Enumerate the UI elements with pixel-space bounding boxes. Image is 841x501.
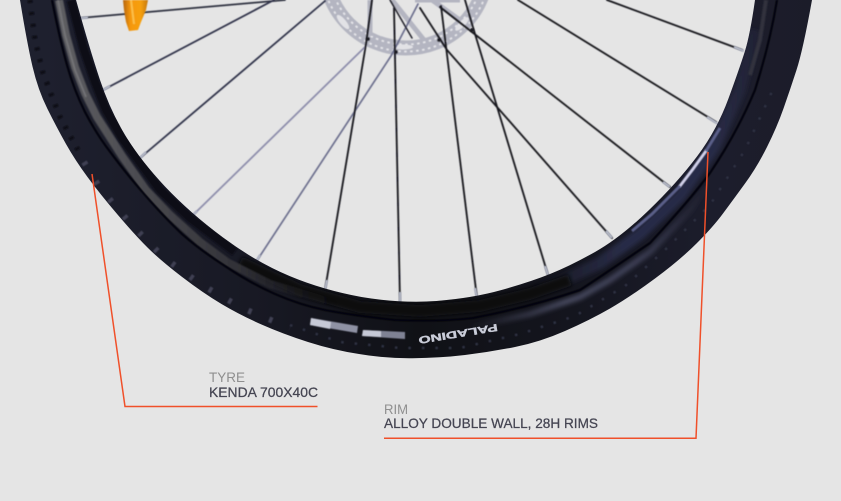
rim top right bbox=[750, 0, 766, 75]
tread knobs lower bbox=[84, 162, 290, 328]
sidewall marking boxes bbox=[310, 318, 405, 339]
label: rim: ALLOY DOUBLE WALL, 28H RIMS bbox=[384, 415, 598, 431]
brake disc bbox=[322, 0, 490, 54]
label: tyre bbox=[209, 369, 318, 400]
label: tyre: KENDA 700X40C bbox=[209, 384, 318, 400]
wheel: tyre and rim bbox=[20, 0, 812, 358]
label: rim bbox=[384, 401, 598, 431]
spokes bbox=[80, 0, 742, 302]
rim grey band left bbox=[54, 0, 308, 298]
rim white highlight bbox=[680, 151, 706, 186]
tyre body bbox=[20, 0, 812, 358]
rim dark inner band left bbox=[71, 0, 235, 252]
label: rim: RIM bbox=[384, 401, 408, 417]
tyre rim boundary bbox=[52, 0, 777, 321]
icon: orange reflector bbox=[123, 0, 148, 31]
tread dots right bbox=[290, 85, 775, 348]
rim dark band bottom bbox=[240, 262, 570, 311]
rim blue band right bbox=[566, 30, 758, 282]
tread knobs upper bbox=[30, 0, 78, 150]
sidewall brand text: PALADINO bbox=[417, 321, 498, 345]
rim blue highlight bbox=[632, 128, 720, 231]
tyre sheen right bbox=[486, 205, 694, 325]
spoke nipples bbox=[78, 18, 744, 302]
leader line: tyre bbox=[92, 174, 318, 406]
label: tyre: TYRE bbox=[209, 369, 245, 385]
leader line: rim bbox=[384, 152, 708, 438]
